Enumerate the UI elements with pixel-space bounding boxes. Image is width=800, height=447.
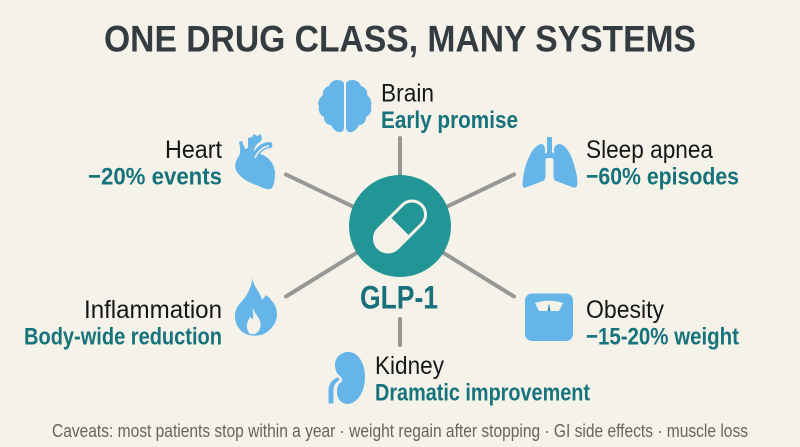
node: inflammation xyxy=(24,278,277,350)
icon: flame xyxy=(235,278,277,336)
icon: kidney xyxy=(328,352,365,404)
label: heart: Heart xyxy=(165,136,222,164)
node: sleep apnea xyxy=(522,136,739,190)
label: inflammation: Inflammation xyxy=(84,296,222,324)
label: brain: Brain xyxy=(381,80,434,108)
icon: lungs xyxy=(522,137,577,188)
hub label: GLP-1 xyxy=(360,280,438,316)
node: kidney xyxy=(328,352,590,406)
icon: scale xyxy=(525,294,573,341)
label: kidney: Kidney xyxy=(375,352,444,380)
node: heart xyxy=(88,134,275,190)
label: obesity: Obesity xyxy=(586,296,664,324)
central hub: pill icon xyxy=(349,175,451,277)
icon: heart xyxy=(235,134,275,189)
icon: brain xyxy=(318,80,371,132)
label: sleep apnea: Sleep apnea xyxy=(586,136,713,164)
value: inflammation: Body-wide reduction xyxy=(24,324,222,350)
value: brain: Early promise xyxy=(381,107,518,134)
value: kidney: Dramatic improvement xyxy=(375,380,590,406)
node: obesity xyxy=(525,294,739,350)
value: obesity: −15-20% weight xyxy=(586,324,739,350)
value: heart: −20% events xyxy=(88,164,222,190)
value: sleep apnea: −60% episodes xyxy=(586,164,739,190)
connector lines xyxy=(286,138,514,345)
title: ONE DRUG CLASS, MANY SYSTEMS xyxy=(104,18,696,60)
node: brain xyxy=(318,80,518,134)
